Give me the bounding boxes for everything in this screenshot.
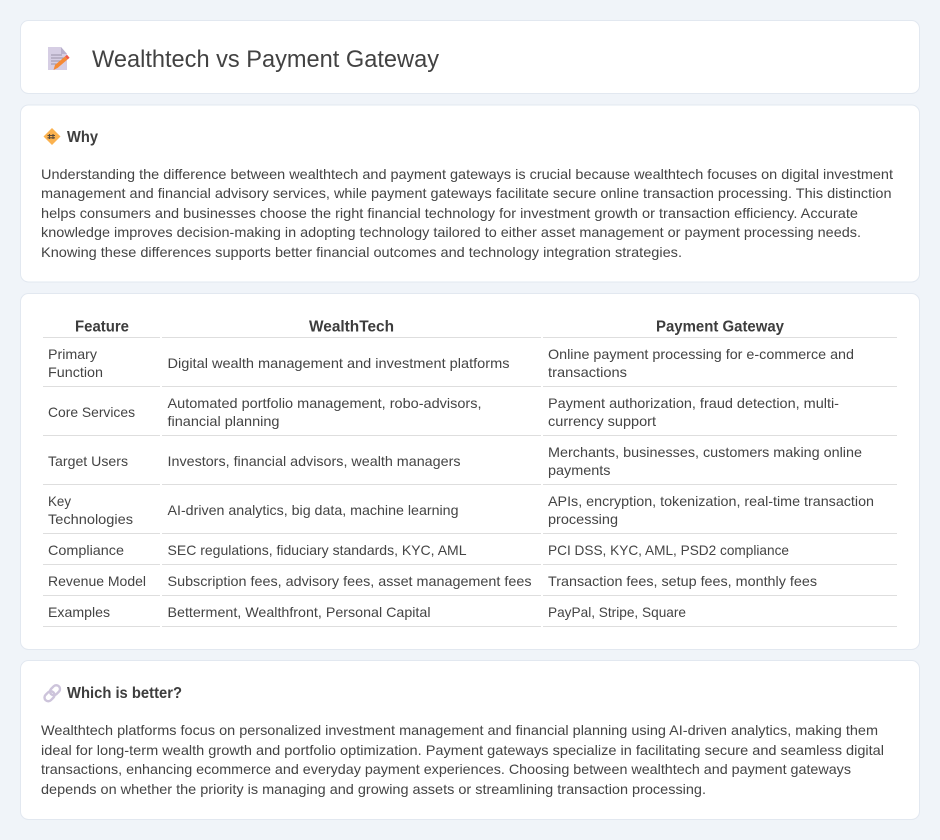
text block: why paragraph: [41, 166, 893, 260]
row: compliance: Compliance: [48, 542, 124, 558]
text block: which is better paragraph: depends on whether the priority is managing and growing assets or streamlining transaction processing.: [41, 781, 706, 797]
row: core services: currency support: [548, 413, 656, 429]
panel: which is better: [20, 660, 920, 820]
table header row: [43, 318, 897, 338]
text block: why paragraph: Knowing these differences supports better financial outcomes and technology integration strategies.: [41, 244, 682, 260]
text block: why paragraph: Understanding the difference between wealthtech and payment gateways is crucial because wealthtech focuses on digital investment: [41, 166, 893, 182]
row: target users: Target Users: [48, 453, 128, 469]
row: primary function: Digital wealth management and investment platforms: [168, 355, 510, 371]
row: compliance: PCI DSS, KYC, AML, PSD2 compliance: [548, 542, 789, 558]
icon: document with pencil: [48, 47, 70, 70]
table header row: WealthTech: [309, 318, 394, 336]
text block: which is better paragraph: transactions, enhancing ecommerce and everyday payment experiences. Choosing between wealthtech and payment gateways: [41, 761, 851, 777]
text block: which is better paragraph: [41, 722, 884, 797]
row: core services: Core Services: [48, 404, 135, 420]
row: compliance: [43, 542, 897, 565]
row: revenue model: Subscription fees, advisory fees, asset management fees: [168, 573, 532, 589]
row: primary function: Primary: [48, 346, 97, 362]
row: primary function: Function: [48, 364, 103, 380]
row: target users: [43, 444, 897, 485]
row: key technologies: APIs, encryption, tokenization, real-time transaction: [548, 493, 874, 509]
row: core services: Payment authorization, fraud detection, multi-: [548, 395, 839, 411]
text block: why paragraph: knowledge improves decision-making in adopting technology tailored to either asset management or payment processing needs.: [41, 224, 861, 240]
row: primary function: transactions: [548, 364, 627, 380]
row: examples: Betterment, Wealthfront, Personal Capital: [168, 604, 430, 620]
table header row: Feature: [75, 318, 129, 336]
row: target users: payments: [548, 462, 610, 478]
row: revenue model: Revenue Model: [48, 573, 146, 589]
text block: why paragraph: management and financial advisory services, while payment gateways facilitate secure online transaction processing. This distinction: [41, 185, 892, 201]
row: key technologies: Technologies: [48, 511, 133, 527]
row: key technologies: Key: [48, 493, 71, 509]
row: key technologies: [43, 493, 897, 534]
row: core services: financial planning: [168, 413, 280, 429]
row: primary function: Online payment processing for e-commerce and: [548, 346, 854, 362]
row: revenue model: Transaction fees, setup fees, monthly fees: [548, 573, 817, 589]
panel: header: [20, 20, 920, 94]
row: target users: Investors, financial advisors, wealth managers: [168, 453, 460, 469]
heading: why: Why: [67, 129, 98, 146]
row: compliance: SEC regulations, fiduciary standards, KYC, AML: [168, 542, 467, 558]
heading: which is better: Which is better?: [67, 685, 182, 702]
row: revenue model: [43, 573, 897, 596]
row: examples: Examples: [48, 604, 110, 620]
row: core services: [43, 395, 897, 436]
panel: why: [20, 105, 920, 282]
title: Wealthtech vs Payment Gateway: [92, 46, 439, 73]
row: key technologies: AI-driven analytics, big data, machine learning: [168, 502, 458, 518]
row: primary function: [43, 346, 897, 387]
panel: comparison table: [20, 294, 920, 650]
text block: which is better paragraph: ideal for long-term wealth growth and portfolio optimization. Payment gateways specialize in facilitating secure and seamless digital: [41, 742, 884, 758]
row: key technologies: processing: [548, 511, 618, 527]
row: examples: PayPal, Stripe, Square: [548, 604, 686, 620]
icon: orange diamond: [44, 128, 60, 145]
row: target users: Merchants, businesses, customers making online: [548, 444, 862, 460]
table header row: Payment Gateway: [656, 318, 784, 336]
row: examples: [43, 604, 897, 627]
icon: chain link: [43, 684, 62, 703]
text block: why paragraph: helps consumers and businesses choose the right financial technology for investment growth or transaction efficiency. Accurate: [41, 205, 858, 221]
row: core services: Automated portfolio management, robo-advisors,: [168, 395, 481, 411]
text block: which is better paragraph: Wealthtech platforms focus on personalized investment management and financial planning using AI-driven analytics, making them: [41, 722, 878, 738]
